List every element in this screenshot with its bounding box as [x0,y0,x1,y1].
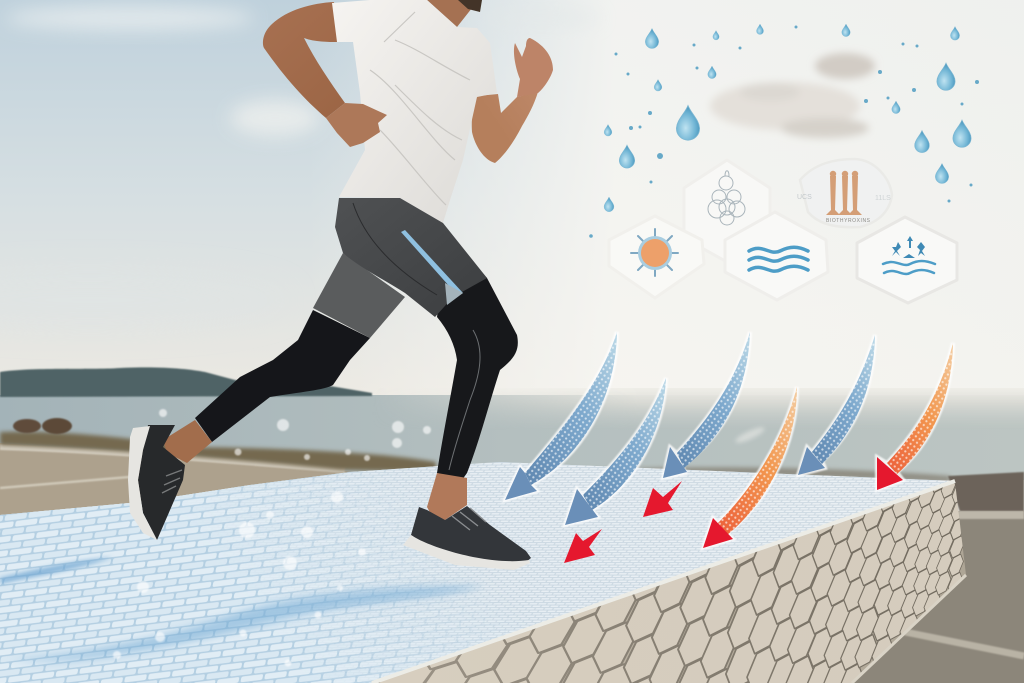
background: sea and far island [0,367,1024,480]
arrow: small red 2 [564,529,602,563]
label: left column caption: UCS [797,194,812,201]
water splash bubbles [113,393,431,666]
runner: front leg tights [437,268,518,480]
flow arrows [505,332,953,563]
runner: rear arm [263,2,345,118]
mat: hexagon foam side [372,481,966,683]
mat: runner shadow [10,586,483,661]
runner: front shoe [403,506,531,570]
hexagon icons panel [609,159,957,303]
arrow: blue 2 [565,378,666,525]
mat: left water streak [0,557,113,584]
runner: neck and beard [427,0,482,27]
arrow: blue 1 [505,332,617,500]
label: column base caption: BIOTHYROXINS [826,218,871,224]
arrow: orange 2 [877,343,953,490]
background: sky [0,0,1024,400]
water droplets [589,24,979,238]
arrow: blue 3 [663,332,750,478]
icon: waves hexagon [725,212,828,300]
runner: shorts [335,198,487,317]
runner: rear ankle [163,420,212,463]
icon: sun hexagon [609,216,704,298]
runner: front arm [472,38,553,163]
runner: rear thigh short [313,253,405,338]
runner: front ankle [427,473,467,520]
arrow: blue 4 [798,335,875,475]
mat: top surface with tile texture [0,462,950,683]
arrow: orange 1 [703,387,797,548]
icon: three columns hexagon [797,159,892,227]
background: grey cloud [710,53,875,138]
icon: molecule cluster hexagon [684,160,770,262]
icon: waves with particles hexagon [857,217,957,303]
runner: rear hand [326,103,387,147]
runner [128,0,553,570]
arrow: small red 1 [643,481,682,517]
background: rocky shore and beach [0,418,1024,683]
label: right column caption: 11LS [875,195,891,202]
runner: white shirt [332,0,497,223]
runner: rear shoe [128,425,185,540]
runner: rear leg tights [195,310,370,442]
